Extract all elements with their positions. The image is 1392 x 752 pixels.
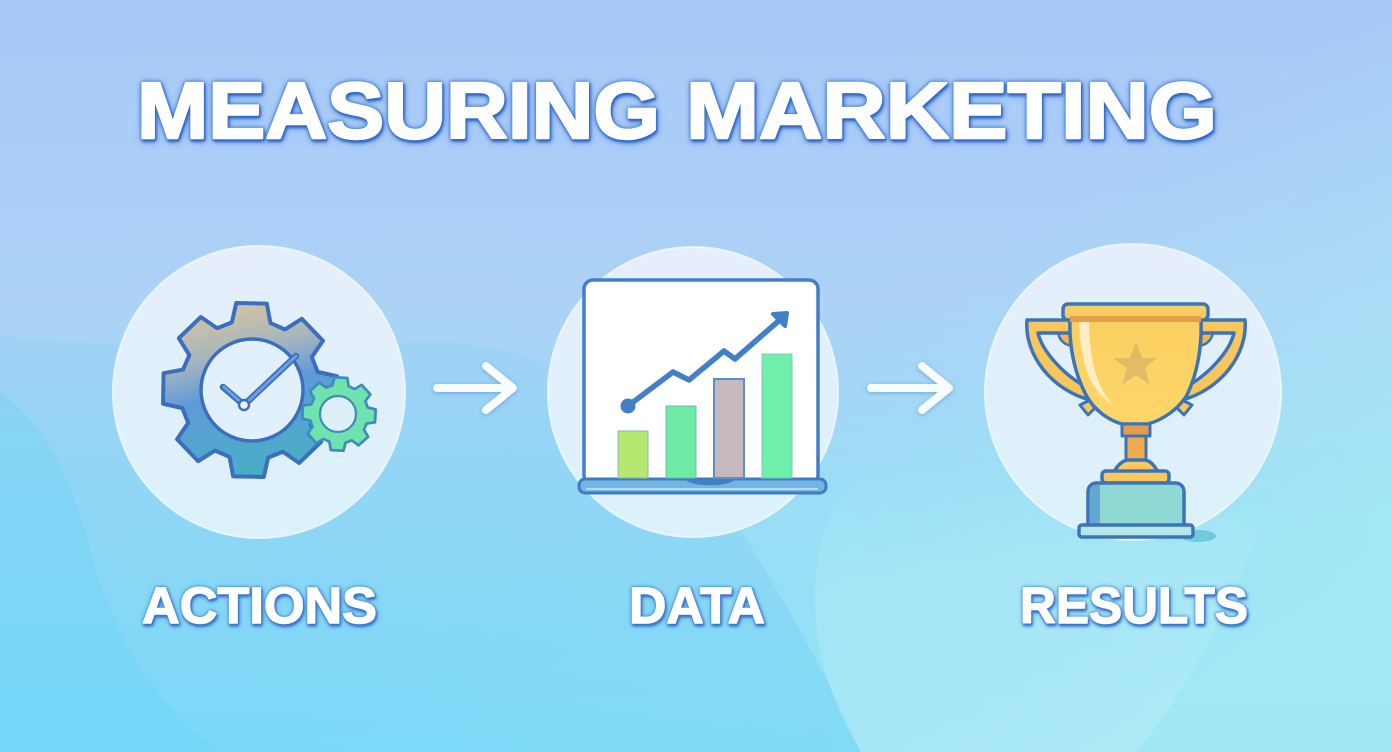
label: data: DATA (629, 577, 765, 634)
icon: small green gear (301, 376, 377, 452)
title: MARKETING (686, 66, 1217, 155)
results disc (985, 244, 1281, 540)
panel: actions (113, 246, 405, 538)
trend arrow (622, 313, 787, 412)
icon: large gear with clock check (162, 302, 338, 478)
label: actions: ACTIONS (142, 577, 377, 634)
data disc (548, 247, 838, 537)
panel: results (985, 244, 1281, 542)
bar chart (618, 354, 792, 478)
title: MEASURING (137, 66, 660, 155)
title (137, 66, 1217, 155)
arrow: actions to data (437, 366, 513, 410)
icon: laptop board (579, 280, 826, 493)
label: results: RESULTS (1020, 577, 1248, 634)
arrow: data to results (871, 366, 949, 410)
actions disc (113, 246, 405, 538)
panel: data (548, 247, 838, 537)
icon: trophy (1027, 304, 1245, 542)
